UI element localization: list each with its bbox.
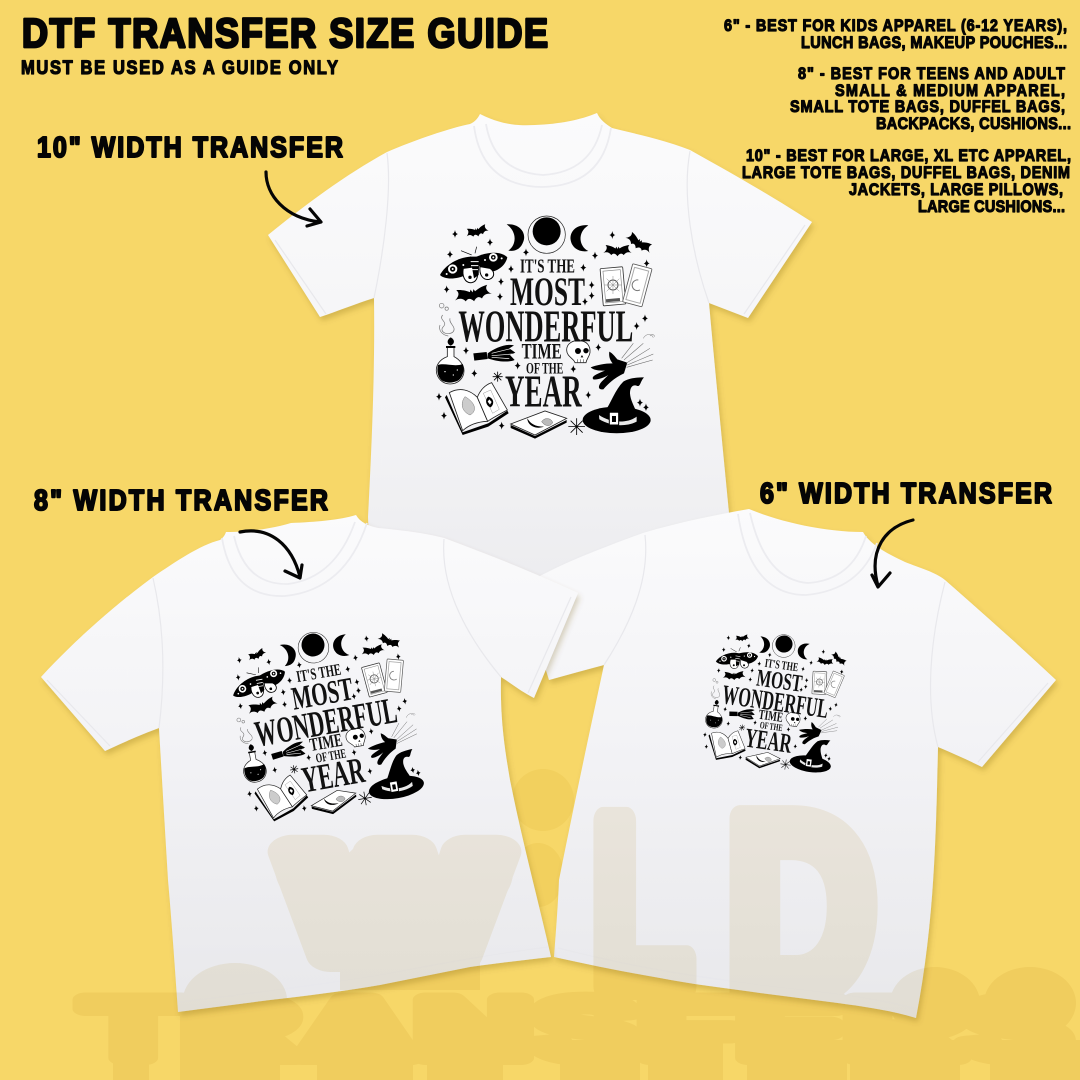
10 inch uses: JACKETS, LARGE PILLOWS, — [849, 181, 1063, 199]
transfer design: 10 inch: OF THE — [526, 360, 563, 377]
transfer design: 10 inch — [436, 216, 655, 439]
6 inch uses: LUNCH BAGS, MAKEUP POUCHES... — [801, 34, 1067, 52]
transfer design: 6 inch — [700, 625, 851, 778]
transfer design: 8 inch — [221, 617, 430, 828]
transfer design: 6 inch: MOST — [755, 665, 804, 698]
8 inch uses: SMALL & MEDIUM APPAREL, — [835, 82, 1065, 100]
label: 8 inch: 8" WIDTH TRANSFER — [34, 484, 328, 516]
transfer design: 10 inch: TIME — [522, 338, 562, 363]
10 inch uses — [742, 147, 1071, 216]
label: 10 inch: 10" WIDTH TRANSFER — [37, 131, 343, 163]
6 inch uses: 6" - BEST FOR KIDS APPAREL (6-12 YEARS), — [724, 17, 1067, 35]
10 inch uses: LARGE TOTE BAGS, DUFFEL BAGS, DENIM — [742, 164, 1070, 182]
shirt: 8 inch — [41, 515, 578, 1012]
watermark: WILD TRANSFERS — [84, 763, 1080, 1080]
watermark: WILD TRANSFERS: W — [292, 819, 498, 987]
transfer design: 6 inch: TIME — [758, 707, 784, 725]
10 inch uses: 10" - BEST FOR LARGE, XL ETC APPAREL, — [746, 147, 1071, 165]
watermark: WILD TRANSFERS: D — [726, 763, 876, 1053]
transfer design: 10 inch: MOST — [510, 269, 585, 314]
transfer design: 8 inch: YEAR — [299, 749, 368, 800]
transfer design: 8 inch: TIME — [308, 730, 344, 756]
transfer design: 6 inch: YEAR — [743, 723, 794, 759]
transfer design: 10 inch: YEAR — [505, 367, 582, 417]
watermark: WILD TRANSFERS: L — [592, 769, 692, 1037]
arrow: 8 inch — [240, 531, 302, 578]
arrow: 10 inch — [266, 172, 321, 226]
transfer design: 6 inch: OF THE — [759, 720, 783, 734]
transfer design: 10 inch: IT'S THE — [520, 256, 575, 278]
transfer design: 8 inch: IT'S THE — [295, 660, 342, 686]
watermark blob on background — [512, 769, 574, 907]
8 inch uses: 8" - BEST FOR TEENS AND ADULT — [798, 65, 1065, 83]
8 inch uses: BACKPACKS, CUSHIONS... — [876, 115, 1071, 133]
label: 6 inch: 6" WIDTH TRANSFER — [760, 477, 1052, 509]
shirt: 6 inch — [530, 509, 1056, 1018]
transfer design: 8 inch: OF THE — [314, 745, 347, 766]
watermark: WILD TRANSFERS: TRANSFERS — [84, 982, 1069, 1077]
transfer design: 6 inch: WONDERFUL — [720, 679, 830, 724]
transfer design: 6 inch: IT'S THE — [764, 656, 799, 674]
arrow: 6 inch — [872, 520, 913, 587]
8 inch uses: SMALL TOTE BAGS, DUFFEL BAGS, — [790, 98, 1065, 116]
transfer design: 8 inch: MOST — [289, 671, 356, 718]
transfer design: 8 inch: WONDERFUL — [252, 689, 400, 755]
6 inch uses — [724, 17, 1067, 52]
size uses text block — [724, 17, 1071, 216]
10 inch uses: LARGE CUSHIONS... — [918, 198, 1065, 216]
title: DTF TRANSFER SIZE GUIDE — [22, 11, 548, 56]
transfer design: 10 inch: WONDERFUL — [458, 302, 633, 352]
8 inch uses — [790, 65, 1071, 133]
shirt: 10 inch — [268, 113, 812, 620]
subtitle: MUST BE USED AS A GUIDE ONLY — [21, 57, 338, 78]
